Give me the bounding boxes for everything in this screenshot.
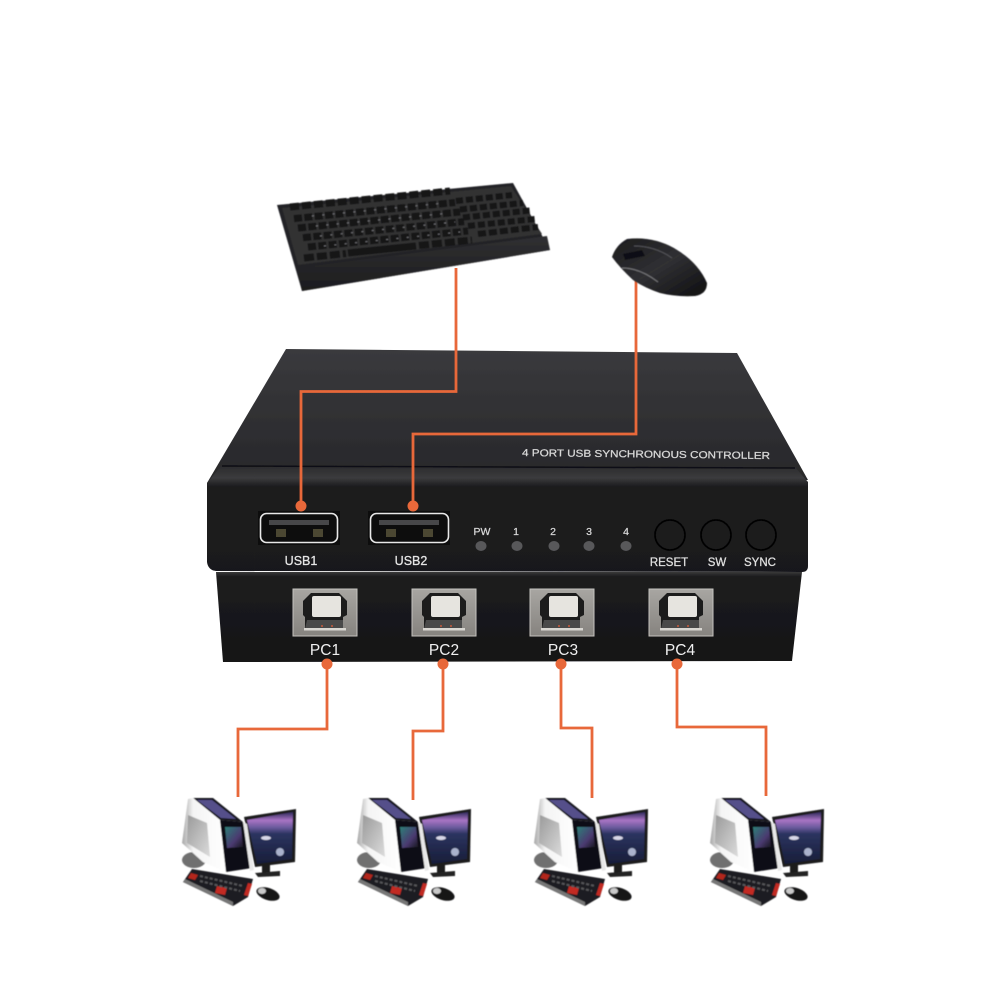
- indicator LEDs and labels: [474, 526, 632, 551]
- keyboard: [277, 183, 550, 291]
- port label PC1: PC1: [310, 642, 340, 659]
- port label PC3: PC3: [548, 642, 578, 659]
- buttons RESET SW SYNC: RESET: [650, 557, 688, 569]
- cable: PC2: [413, 658, 448, 800]
- indicator LEDs and labels: 4: [623, 526, 629, 538]
- device lower front panel: [216, 572, 802, 662]
- port label USB2: USB2: [395, 554, 427, 568]
- cable: PC3: [556, 658, 592, 798]
- cable: mouse to USB2: [408, 275, 636, 512]
- device upper front panel: [207, 465, 808, 572]
- USB-B port PC1: [293, 589, 357, 636]
- indicator LEDs and labels: 2: [550, 526, 556, 538]
- buttons RESET SW SYNC: SYNC: [744, 557, 776, 569]
- device top panel: [207, 349, 808, 483]
- computer 2: [357, 798, 471, 906]
- computer 1: [182, 798, 296, 906]
- USB-B port PC4: [649, 589, 713, 636]
- USB-B port PC3: [530, 589, 594, 636]
- USB-A port 1: [258, 511, 340, 545]
- computer 4: [710, 798, 824, 906]
- buttons RESET SW SYNC: [650, 520, 776, 569]
- port label USB1: USB1: [285, 554, 317, 568]
- cable: PC4: [672, 658, 766, 796]
- port label PC2: PC2: [429, 642, 459, 659]
- mouse: [612, 238, 707, 296]
- indicator LEDs and labels: PW: [474, 526, 491, 538]
- product name on top: 4 PORT USB SYNCHRONOUS CONTROLLER: [522, 448, 770, 462]
- cable: PC1: [238, 658, 332, 797]
- USB-A port 2: [368, 511, 450, 545]
- USB-B port PC2: [412, 589, 476, 636]
- KVM switch device: [207, 349, 808, 662]
- port label PC4: PC4: [665, 642, 695, 659]
- indicator LEDs and labels: 3: [586, 526, 592, 538]
- cable: keyboard to USB1: [296, 268, 456, 512]
- indicator LEDs and labels: 1: [513, 526, 519, 538]
- buttons RESET SW SYNC: SW: [708, 557, 726, 569]
- computer 3: [534, 798, 648, 906]
